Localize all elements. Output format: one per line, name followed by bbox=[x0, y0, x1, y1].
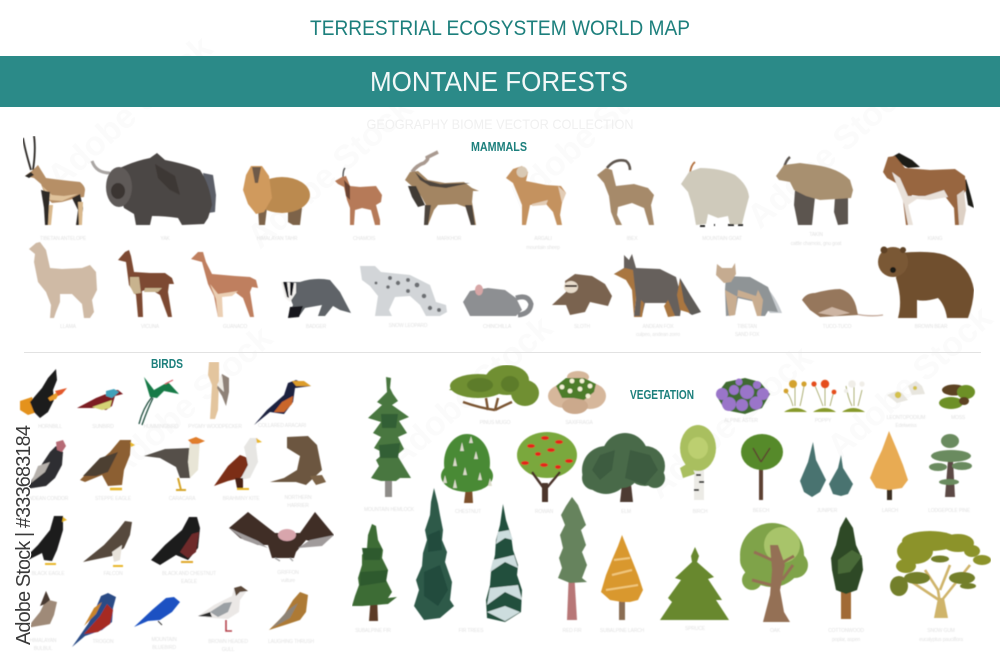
banner: montane forests: MONTANE FORESTS bbox=[370, 66, 628, 97]
bird: pygmy woodpecker: PYGMY WOODPECKER bbox=[188, 424, 242, 430]
watermark: repeating stock text: Adobe Stock bbox=[240, 89, 420, 256]
bird: brown headed gull: GULL bbox=[222, 647, 235, 653]
animal: guanaco: GUANACO bbox=[223, 324, 247, 330]
watermark: repeating stock text: Adobe Stock bbox=[820, 299, 1000, 466]
bird: falcon bbox=[83, 521, 132, 577]
tree: beech bbox=[741, 434, 783, 514]
plant: moss bbox=[939, 384, 975, 421]
panel: vegetation bbox=[352, 365, 991, 643]
bird: brahminy kite: BRAHMINY KITE bbox=[223, 496, 260, 502]
animal: chamois: CHAMOIS bbox=[353, 236, 376, 242]
animal: markhor bbox=[405, 152, 479, 242]
animal: tibetan sand fox bbox=[716, 263, 782, 338]
bird: mountain bluebird: MOUNTAIN bbox=[151, 637, 177, 643]
animal: vicuna bbox=[118, 250, 174, 330]
tree: birch: BIRCH bbox=[693, 509, 708, 515]
animal: tibetan sand fox: TIBETAN bbox=[737, 324, 757, 330]
animal: tibetan antelope bbox=[23, 136, 87, 242]
tree: red fir bbox=[558, 497, 587, 634]
bird: falcon: FALCON bbox=[103, 571, 123, 577]
title: TERRESTRIAL ECOSYSTEM WORLD MAP bbox=[310, 17, 690, 40]
tree: elm: ELM bbox=[621, 509, 631, 515]
tree: spruce bbox=[660, 547, 729, 632]
tree: larch: LARCH bbox=[882, 508, 899, 514]
bird: hummingbird bbox=[139, 377, 179, 430]
bird: laughing thrush: LAUGHING THRUSH bbox=[268, 639, 315, 645]
animal: andean fox bbox=[614, 254, 701, 338]
bird: mountain bluebird bbox=[134, 597, 180, 651]
banner: montane forests bbox=[0, 56, 1000, 107]
animal: chamois bbox=[335, 168, 382, 242]
bird: laughing thrush bbox=[268, 592, 315, 645]
animal: takin: TAKIN bbox=[809, 232, 823, 238]
tree: lodgepole pine bbox=[928, 434, 972, 514]
tree: elm bbox=[582, 433, 665, 515]
bird: northern harrier: NORTHERN bbox=[284, 495, 312, 501]
animal: brown bear bbox=[878, 246, 974, 330]
bird: collared aracari: COLLARED ARACARI bbox=[258, 423, 306, 429]
animal: argali bbox=[506, 166, 566, 251]
bird: andean condor: ANDEAN CONDOR bbox=[26, 496, 69, 502]
tree: cottonwood: COTTONWOOD bbox=[828, 628, 864, 634]
animal: markhor: MARKHOR bbox=[437, 236, 462, 242]
divider between mammals and lower sections bbox=[24, 352, 981, 353]
panel: mammals bbox=[23, 136, 974, 338]
bird: trogon: TROGON bbox=[92, 639, 114, 645]
plant: saxifraga: SAXIFRAGA bbox=[565, 420, 593, 426]
bird: hummingbird: HUMMINGBIRD bbox=[144, 424, 179, 430]
animal: chinchilla bbox=[463, 284, 531, 330]
watermark: repeating stock text: Adobe Stock bbox=[380, 309, 560, 476]
animal: badger bbox=[281, 279, 351, 330]
tree: subalpine larch bbox=[600, 535, 645, 634]
bird: black eagle: BLACK EAGLE bbox=[32, 571, 65, 577]
tree: spruce: SPRUCE bbox=[685, 626, 706, 632]
animal: argali: ARGALI bbox=[534, 236, 552, 242]
animal: guanaco bbox=[191, 252, 258, 330]
plant: leontopodium bbox=[887, 381, 925, 429]
bird: black and chestnut eagle bbox=[151, 517, 216, 585]
bird: himalayan bulbul bbox=[27, 591, 57, 652]
animal: yak: YAK bbox=[160, 236, 170, 242]
tree: rowan: ROWAN bbox=[535, 509, 554, 515]
animal: llama: LLAMA bbox=[60, 324, 77, 330]
heading: birds: BIRDS bbox=[151, 356, 183, 371]
tree: larch bbox=[870, 431, 908, 514]
bird: hornbill: HORNBILL bbox=[38, 424, 62, 430]
animal: kiang bbox=[883, 153, 974, 242]
shrub: juniper: JUNIPER bbox=[817, 508, 838, 514]
shrub: juniper bbox=[800, 442, 853, 514]
tree: snow gum bbox=[890, 531, 991, 643]
animal: badger: BADGER bbox=[306, 324, 327, 330]
bird: black and chestnut eagle: EAGLE bbox=[181, 579, 198, 585]
plant: alpine aster bbox=[716, 378, 770, 424]
bird: sunbird bbox=[77, 389, 123, 430]
watermark: repeating stock text: Adobe Stock bbox=[40, 29, 220, 196]
bird: brahminy kite bbox=[214, 438, 262, 502]
bird: black eagle bbox=[18, 516, 67, 577]
bird: himalayan bulbul: BULBUL bbox=[34, 646, 53, 652]
bird: hornbill bbox=[20, 369, 67, 430]
animal: argali: mountain sheep bbox=[526, 245, 560, 251]
tree: oak bbox=[740, 523, 808, 634]
animal: takin bbox=[776, 157, 853, 247]
tree: chestnut bbox=[441, 434, 493, 515]
animal: sloth bbox=[552, 274, 612, 330]
animal: llama bbox=[29, 242, 97, 330]
animal: snow leopard bbox=[360, 266, 447, 329]
bird: caracara: CARACARA bbox=[169, 496, 196, 502]
bird: brown headed gull bbox=[198, 586, 248, 653]
bird: andean condor bbox=[26, 440, 69, 502]
bird: griffon vulture: GRIFFON bbox=[277, 570, 299, 576]
tree: cottonwood: poplar, aspen bbox=[832, 637, 860, 643]
heading: vegetation: VEGETATION bbox=[630, 387, 694, 402]
heading: mammals: MAMMALS bbox=[471, 139, 527, 154]
bird: black and chestnut eagle: BLACK AND CHESTNUT bbox=[162, 571, 216, 577]
animal: yak bbox=[92, 153, 216, 242]
bird: northern harrier: HARRIER bbox=[287, 503, 309, 509]
tree: beech: BEECH bbox=[753, 508, 770, 514]
animal: andean fox: ANDEAN FOX bbox=[642, 324, 674, 330]
bird: pygmy woodpecker bbox=[188, 362, 242, 430]
tree: subalpine fir bbox=[352, 524, 397, 634]
animal: tibetan sand fox: SAND FOX bbox=[735, 332, 760, 338]
shrub: pinus mugo: PINUS MUGO bbox=[480, 420, 511, 426]
tree: mountain hemlock bbox=[364, 377, 415, 513]
bird: steppe eagle bbox=[80, 440, 135, 502]
stock id vertical text: Adobe Stock | #333683184 bbox=[13, 425, 35, 645]
animal: tuco-tuco bbox=[802, 289, 883, 330]
tree: birch bbox=[680, 425, 716, 515]
bird: trogon bbox=[72, 593, 116, 647]
tree: rowan bbox=[517, 432, 577, 515]
watermark: repeating stock text bbox=[40, 29, 1000, 506]
tree: chestnut: CHESTNUT bbox=[455, 509, 481, 515]
animal: tuco-tuco: TUCO-TUCO bbox=[823, 324, 852, 330]
animal: himalayan tahr: HIMALAYAN TAHR bbox=[257, 236, 298, 242]
animal: mountain goat bbox=[681, 162, 749, 242]
animal: brown bear: BROWN BEAR bbox=[915, 324, 948, 330]
subtitle: GEOGRAPHY BIOME VECTOR COLLECTION bbox=[366, 116, 634, 132]
animal: chinchilla: CHINCHILLA bbox=[483, 324, 512, 330]
plant: poppy bbox=[784, 380, 865, 424]
animal: andean fox: culpeo, andean zorro bbox=[636, 332, 680, 338]
animal: ibex bbox=[597, 160, 654, 242]
bird: griffon vulture bbox=[229, 512, 334, 584]
watermark: repeating stock text: Adobe Stock bbox=[500, 49, 680, 216]
animal: takin: cattle chamois, gnu goat bbox=[791, 241, 842, 247]
bird: steppe eagle: STEPPE EAGLE bbox=[95, 496, 132, 502]
plant: leontopodium: Edelweiss bbox=[895, 423, 917, 429]
plant: poppy: POPPY bbox=[815, 418, 832, 424]
animal: vicuna: VICUNA bbox=[141, 324, 160, 330]
bird: griffon vulture: vulture bbox=[281, 578, 295, 584]
tree: snowy fir bbox=[486, 504, 522, 622]
watermark: repeating stock text: Adobe Stock bbox=[100, 319, 280, 486]
tree: subalpine larch: SUBALPINE LARCH bbox=[600, 628, 645, 634]
tree: snow gum: eucalyptus pauciflora bbox=[919, 637, 963, 643]
tree: mountain hemlock: MOUNTAIN HEMLOCK bbox=[364, 507, 415, 513]
tree: fir trees bbox=[414, 488, 484, 634]
animal: mountain goat: MOUNTAIN GOAT bbox=[702, 236, 742, 242]
tree: red fir: RED FIR bbox=[563, 628, 582, 634]
shrub: pinus mugo bbox=[449, 365, 539, 426]
watermark: repeating stock text: Adobe Stock bbox=[740, 69, 920, 236]
bird: sunbird: SUNBIRD bbox=[92, 424, 114, 430]
bird: northern harrier bbox=[270, 436, 326, 509]
animal: himalayan tahr bbox=[243, 166, 310, 242]
bird: himalayan bulbul: HIMALAYAN bbox=[30, 638, 57, 644]
tree: subalpine fir: SUBALPINE FIR bbox=[355, 628, 391, 634]
panel: birds bbox=[18, 362, 334, 653]
bird: mountain bluebird: BLUEBIRD bbox=[152, 645, 176, 651]
tree: lodgepole pine: LODGEPOLE PINE bbox=[928, 508, 971, 514]
animal: sloth: SLOTH bbox=[574, 324, 590, 330]
bird: caracara bbox=[144, 437, 205, 502]
bird: collared aracari bbox=[254, 380, 311, 429]
tree: oak: OAK bbox=[770, 628, 781, 634]
watermark: repeating stock text: Adobe Stock bbox=[640, 339, 820, 506]
tree: snow gum: SNOW GUM bbox=[927, 628, 955, 634]
plant: moss: MOSS bbox=[951, 415, 966, 421]
plant: alpine aster: ALPINE ASTER bbox=[724, 418, 758, 424]
animal: ibex: IBEX bbox=[627, 236, 638, 242]
animal: tibetan antelope: TIBETAN ANTELOPE bbox=[40, 236, 87, 242]
plant: saxifraga bbox=[548, 371, 606, 426]
tree: fir trees: FIR TREES bbox=[459, 628, 484, 634]
plant: leontopodium: LEONTOPODIUM bbox=[887, 415, 925, 421]
animal: snow leopard: SNOW LEOPARD bbox=[389, 323, 428, 329]
animal: kiang: KIANG bbox=[928, 236, 943, 242]
tree: cottonwood bbox=[828, 517, 864, 643]
bird: brown headed gull: BROWN HEADED bbox=[208, 639, 248, 645]
